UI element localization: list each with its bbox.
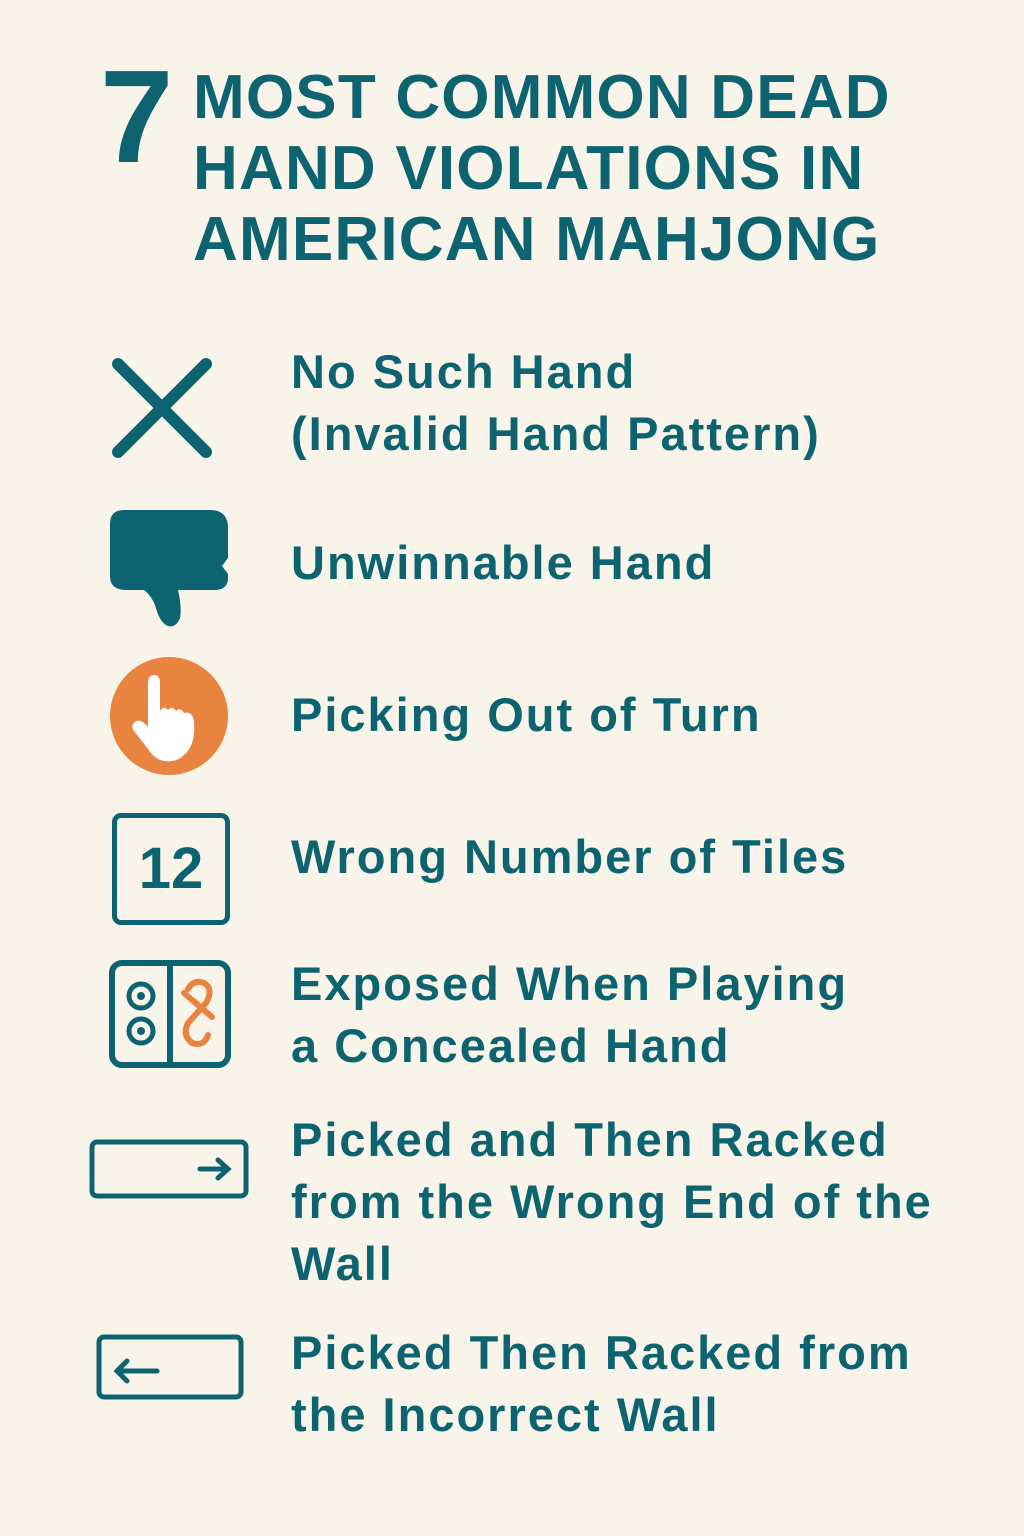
title: MOST COMMON DEAD xyxy=(193,63,891,132)
text: item 7: Picked Then Racked from xyxy=(291,1326,912,1379)
title: HAND VIOLATIONS IN xyxy=(193,134,864,203)
text: item 7 xyxy=(291,1326,912,1441)
icon: tiles xyxy=(109,960,231,1068)
icon: wall left arrow xyxy=(96,1334,244,1400)
text: item 6: from the Wrong End of the xyxy=(291,1175,933,1228)
title xyxy=(193,63,891,274)
text: item 1: (Invalid Hand Pattern) xyxy=(291,407,821,460)
text: item 2: Unwinnable Hand xyxy=(291,536,715,589)
text: item 1 xyxy=(291,345,821,460)
icon: wall right arrow xyxy=(90,1140,248,1198)
text: item 5: Exposed When Playing xyxy=(291,957,848,1010)
text: item 5: a Concealed Hand xyxy=(291,1019,730,1072)
title number: 7 xyxy=(100,43,173,190)
text: item 6: Picked and Then Racked xyxy=(291,1113,889,1166)
text: item 6 xyxy=(291,1113,933,1290)
icon: 12 tile: 12 xyxy=(139,836,203,901)
text: item 7: the Incorrect Wall xyxy=(291,1388,720,1441)
icon: thumbs down xyxy=(110,510,228,626)
icon: X xyxy=(112,358,212,458)
text: item 1: No Such Hand xyxy=(291,345,636,398)
text: item 3: Picking Out of Turn xyxy=(291,688,762,741)
title: AMERICAN MAHJONG xyxy=(193,205,880,274)
text: item 6: Wall xyxy=(291,1237,394,1290)
text: item 4: Wrong Number of Tiles xyxy=(291,830,848,883)
icon: 12 tile xyxy=(112,813,230,925)
text: item 5 xyxy=(291,957,848,1072)
icon: pointing hand xyxy=(110,657,228,775)
